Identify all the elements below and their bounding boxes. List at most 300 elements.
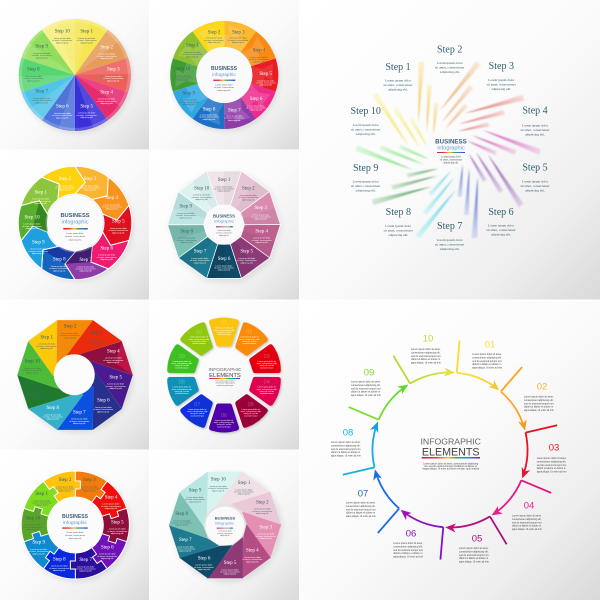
step 10: Step 10	[175, 67, 191, 72]
step 4	[252, 229, 272, 244]
step 5: adipiscing elit.	[525, 189, 545, 193]
step 6: adipiscing elit.	[218, 269, 231, 272]
step 10: adipiscing elit.	[195, 198, 209, 201]
step 7	[76, 558, 96, 573]
tile 09	[172, 354, 192, 369]
step 2: Step 2	[208, 30, 221, 35]
step 9	[29, 541, 49, 555]
step 1: sit amet, consectetuer	[77, 39, 97, 42]
description 03: agna aliqua. Ut enim ad min	[537, 471, 567, 474]
centre title: Lorem ipsum dolor sit amet, consectetuer adipiscing	[423, 462, 478, 465]
tile 09: amet, consectetuer adip	[172, 362, 192, 365]
centre title: adipiscing elit.	[219, 234, 230, 237]
step 3: Step 3	[489, 61, 514, 72]
step 5	[256, 72, 276, 87]
description 10: sed do eiusmod tempor inci-	[411, 355, 441, 358]
step 8: adipiscing elit.	[27, 79, 40, 82]
step 10: sit amet, consectetuer	[208, 487, 229, 490]
step 2	[435, 44, 465, 74]
step 10: sit amet, consectetuer	[351, 128, 381, 132]
tile 05: 05	[248, 402, 254, 408]
step 6: Lorem ipsum dolor	[98, 255, 115, 257]
step labels	[173, 30, 276, 122]
step 2: sit amet, consectetuer	[435, 65, 465, 70]
step 3: adipiscing elit.	[90, 343, 103, 346]
step 1: sit amet, consectetuer	[31, 200, 51, 203]
tile 09: 09	[179, 354, 185, 360]
step labels	[23, 478, 128, 573]
step 6: sit amet, consectetuer	[214, 266, 234, 269]
step 1: sit amet, consectetuer	[32, 501, 52, 504]
tile 07: amet, consectetuer adip	[187, 410, 207, 413]
step 9: Lorem ipsum dolor	[27, 394, 43, 396]
centre title: infographic	[437, 146, 465, 152]
step 6	[52, 105, 73, 119]
step labels	[176, 178, 272, 272]
step numbers: 09	[364, 368, 374, 378]
description 04: agna aliqua. Ut enim ad min	[512, 528, 542, 531]
step 4: Lorem ipsum dolor	[98, 99, 115, 101]
tile 03: 03	[264, 354, 270, 360]
description 04: consectetuer adipiscing elit,	[512, 518, 542, 521]
step 8	[23, 68, 44, 82]
step 10: sit amet, consectetuer	[173, 77, 193, 80]
step 6: Lorem ipsum dolor	[216, 265, 232, 267]
tile 02	[239, 330, 259, 345]
step 7: adipiscing elit.	[35, 101, 49, 104]
step 6: adipiscing elit.	[100, 258, 114, 261]
step 2	[204, 30, 224, 44]
step 6	[246, 97, 266, 112]
step 8: Step 8	[53, 557, 66, 562]
step 5: Step 5	[112, 220, 125, 225]
panel: rainbow pinwheel with hole	[17, 320, 133, 433]
step 1: Lorem ipsum dolor	[385, 78, 411, 82]
step 3	[79, 478, 100, 493]
step 8: adipiscing elit.	[388, 233, 408, 237]
centre title: magna aliqua. Ut enim ad minim veniam, quis nostrud	[422, 468, 480, 471]
step 1: Step 1	[40, 335, 54, 340]
step 5: Step 5	[80, 104, 94, 109]
centre title: INFOGRAPHIC	[208, 367, 242, 373]
step 8	[49, 258, 70, 272]
centre title	[196, 47, 252, 103]
description 05: didunt ut labore et dolore m	[459, 557, 488, 560]
step 8: Lorem ipsum dolor	[44, 414, 61, 416]
tile 05: eiusmod tempor	[244, 414, 258, 417]
step numbers: 02	[537, 382, 547, 392]
step 4: Lorem ipsum dolor	[244, 557, 261, 559]
step 5: Lorem ipsum dolor	[257, 80, 274, 82]
centre hole	[54, 354, 95, 395]
step 6	[97, 545, 118, 560]
step 9: Step 9	[189, 489, 202, 494]
panel: circular arrow cycle with spokes	[331, 332, 568, 568]
centre title: ELEMENTS	[422, 447, 480, 459]
step 7: sit amet, consectetuer	[76, 567, 96, 570]
description 08: Lorem ipsum dolor sit amet,	[331, 441, 360, 444]
description 08: sed do eiusmod tempor inci-	[331, 448, 361, 451]
step 5: sit amet, consectetuer	[237, 259, 257, 262]
step 4: sit amet, consectetuer	[103, 359, 124, 362]
step 3	[487, 61, 517, 91]
step 10: adipiscing elit.	[56, 41, 69, 44]
description 09: didunt ut labore et dolore m	[351, 391, 380, 394]
tile 01: amet, consectetuer adip	[214, 329, 234, 332]
step 8: sit amet, consectetuer	[384, 228, 414, 233]
step 6: Lorem ipsum dolor	[196, 565, 212, 567]
description 02: sed do eiusmod tempor inci-	[524, 402, 554, 405]
step 7: Lorem ipsum dolor	[71, 419, 88, 421]
tile 01: Lorem ipsum dolor sit	[215, 328, 233, 330]
tile 04: Lorem ipsum dolor sit	[258, 387, 276, 389]
step 8: Step 8	[53, 258, 66, 263]
step 1	[37, 335, 57, 350]
step 4: sit amet, consectetuer	[249, 58, 269, 61]
centre title: Lorem ipsum dolor	[66, 532, 84, 534]
tile 07	[187, 402, 207, 417]
step 6	[486, 207, 517, 237]
tile 02: eiusmod tempor	[243, 342, 256, 345]
swirl blades	[169, 471, 281, 579]
step 3: sit amet, consectetuer	[103, 77, 124, 80]
description 09: agna aliqua. Ut enim ad min	[351, 394, 381, 397]
step 2: adipiscing elit.	[256, 512, 269, 515]
step 8: Step 8	[203, 108, 216, 113]
step 4: Lorem ipsum dolor	[253, 238, 270, 240]
step 1: adipiscing elit.	[40, 347, 54, 350]
step 9: adipiscing elit.	[182, 103, 196, 106]
step 1: Step 1	[385, 62, 411, 73]
tile text	[172, 320, 277, 428]
step 8: Lorem ipsum dolor	[385, 224, 411, 228]
step labels	[172, 478, 276, 576]
step 2: sit amet, consectetuer	[60, 334, 80, 337]
step 7: sit amet, consectetuer	[435, 242, 465, 247]
step 3: Step 3	[232, 30, 245, 35]
step 9: adipiscing elit.	[32, 252, 45, 255]
step 4: adipiscing elit.	[105, 507, 118, 510]
step 4	[242, 549, 263, 563]
puzzle pieces	[14, 463, 136, 587]
step 1: adipiscing elit.	[186, 55, 199, 58]
step 7: Step 7	[73, 410, 86, 415]
step 9: Step 9	[35, 45, 49, 50]
step numbers: 01	[485, 340, 495, 350]
centre title: Lorem ipsum dolor	[215, 84, 233, 86]
step 8	[199, 108, 219, 121]
description 03: consectetuer adipiscing elit,	[537, 460, 566, 463]
step 4	[249, 49, 269, 63]
step 5: Lorem ipsum dolor	[78, 113, 95, 115]
step 6: Step 6	[56, 105, 69, 110]
tile 06: amet, consectetuer adip	[214, 421, 234, 424]
centre title: INFOGRAPHIC	[421, 436, 481, 446]
tile 04: eiusmod tempor	[260, 392, 274, 395]
pie wedges	[11, 10, 138, 140]
step numbers: 05	[472, 534, 482, 544]
step 10: adipiscing elit.	[26, 528, 40, 531]
step 6	[97, 246, 117, 261]
step 2	[252, 500, 273, 515]
tile 10	[189, 330, 209, 345]
step 9: Lorem ipsum dolor	[180, 100, 197, 102]
centre title: Lorem ipsum dolor sit amet,	[215, 382, 235, 383]
step 4	[97, 90, 117, 105]
step 5: Lorem ipsum dolor	[109, 529, 126, 531]
step 9	[25, 386, 45, 401]
step 7: Step 7	[194, 250, 207, 255]
tile 06	[214, 413, 234, 428]
step 5	[107, 520, 128, 535]
step 8: sit amet, consectetuer	[49, 267, 70, 270]
step 5: sit amet, consectetuer	[106, 385, 126, 388]
centre title: adipiscing elit.	[220, 534, 231, 537]
step 9: Step 9	[179, 205, 193, 210]
tile 04: amet, consectetuer adip	[257, 388, 277, 391]
step 6: Step 6	[198, 556, 211, 561]
step 3	[251, 206, 271, 221]
step 3: adipiscing elit.	[491, 87, 511, 91]
step 9: Step 9	[29, 386, 42, 391]
centre title: sit amet, consectetuer	[214, 86, 234, 89]
step 5	[108, 220, 129, 234]
step 4: Step 4	[255, 229, 269, 234]
step 2: sit amet, consectetuer	[97, 55, 117, 58]
centre title: Lorem ipsum dolor	[217, 231, 231, 232]
centre title: BUSINESS	[215, 516, 236, 520]
step 4: adipiscing elit.	[246, 560, 259, 563]
step 2: Lorem ipsum dolor	[62, 333, 78, 335]
step 7	[175, 538, 196, 553]
description 01: agna aliqua. Ut enim ad min	[472, 367, 503, 370]
centre title: sed do eiusmod tempor	[217, 384, 234, 387]
step 4: adipiscing elit.	[255, 241, 269, 244]
step 5: Lorem ipsum dolor	[522, 180, 548, 184]
step 10: Lorem ipsum dolor	[210, 486, 227, 488]
step 4: adipiscing elit.	[253, 60, 266, 63]
description 07: Lorem ipsum dolor sit amet,	[346, 502, 376, 504]
step 9: adipiscing elit.	[356, 189, 376, 193]
step 1	[31, 190, 51, 205]
step 6: sit amet, consectetuer	[52, 114, 73, 117]
step 7: Lorem ipsum dolor	[192, 258, 208, 260]
step 1: sit amet, consectetuer	[182, 53, 203, 56]
step 6: adipiscing elit.	[491, 233, 511, 237]
step 7: sit amet, consectetuer	[175, 547, 196, 550]
description 01: consectetuer adipiscing elit,	[472, 356, 502, 359]
step 1: Step 1	[186, 44, 199, 49]
step 1	[32, 492, 52, 507]
step 2: adipiscing elit.	[100, 57, 114, 60]
step 6: sit amet, consectetuer	[194, 566, 214, 569]
centre title: infographic	[63, 520, 88, 526]
step 7: Step 7	[79, 558, 93, 563]
step 9: sit amet, consectetuer	[32, 54, 52, 57]
step 2: Step 2	[100, 45, 114, 50]
step 1: Lorem ipsum dolor	[184, 52, 201, 54]
step 3: sit amet, consectetuer	[487, 83, 517, 88]
description 05: agna aliqua. Ut enim ad min	[459, 561, 489, 564]
centre title: infographic	[215, 520, 234, 526]
step 10: Step 10	[351, 106, 381, 117]
centre title: BUSINESS	[211, 66, 238, 72]
step 6: sit amet, consectetuer	[246, 107, 266, 110]
tile 04	[257, 380, 277, 395]
step 6: sit amet, consectetuer	[97, 555, 118, 558]
step 3: Step 3	[107, 68, 120, 73]
tile 08	[172, 380, 192, 395]
step 5: Step 5	[522, 163, 548, 174]
tile 08: iscing elit, sed do	[174, 390, 189, 393]
tile 02: iscing elit, sed do	[242, 340, 257, 343]
centre title: sit amet, consectetuer	[65, 534, 85, 537]
step 5: sit amet, consectetuer	[108, 229, 129, 232]
step 2: adipiscing elit.	[59, 189, 72, 192]
tile 04: iscing elit, sed do	[259, 390, 274, 393]
step 8	[172, 512, 192, 527]
step 9: Lorem ipsum dolor	[30, 549, 47, 551]
step 7: Step 7	[228, 109, 241, 114]
step labels	[351, 44, 551, 251]
step 5: Lorem ipsum dolor	[222, 569, 238, 571]
step 3: Lorem ipsum dolor	[252, 214, 269, 216]
step 4: Step 4	[522, 106, 548, 117]
step 7: adipiscing elit.	[440, 247, 460, 251]
step 4: Lorem ipsum dolor	[251, 57, 267, 59]
step 2: Lorem ipsum dolor	[437, 61, 463, 65]
description 08: agna aliqua. Ut enim ad min	[331, 455, 361, 458]
step 5	[237, 250, 257, 264]
step 4: adipiscing elit.	[105, 208, 119, 211]
step 8: Step 8	[386, 207, 411, 218]
step 3	[86, 331, 106, 346]
step 1: adipiscing elit.	[34, 202, 48, 205]
description 06: sed do eiusmod tempor inci-	[393, 549, 424, 552]
step 1: Step 1	[238, 481, 251, 486]
step 2: adipiscing elit.	[242, 198, 255, 201]
step 6: Lorem ipsum dolor	[54, 113, 71, 115]
step 3: adipiscing elit.	[84, 189, 97, 192]
tile 05: iscing elit, sed do	[243, 412, 258, 415]
tile 06: Lorem ipsum dolor sit	[215, 420, 233, 422]
step 1: adipiscing elit.	[35, 504, 49, 507]
step 8: sit amet, consectetuer	[49, 567, 70, 570]
step 7	[224, 109, 245, 122]
step 8: adipiscing elit.	[53, 569, 66, 572]
step 10: adipiscing elit.	[26, 227, 39, 230]
description 09: consectetuer adipiscing elit,	[351, 384, 381, 387]
description 06: didunt ut labore et dolore m	[393, 552, 422, 555]
step 1: adipiscing elit.	[238, 493, 251, 496]
step 5	[220, 561, 240, 576]
step 10	[23, 516, 43, 531]
tile 03: amet, consectetuer adip	[257, 362, 277, 365]
step 9	[176, 205, 196, 219]
step 7: Lorem ipsum dolor	[177, 546, 194, 548]
step 10: sit amet, consectetuer	[22, 225, 42, 228]
step 10: Step 10	[25, 360, 40, 365]
step 4: Lorem ipsum dolor	[522, 123, 548, 127]
step 5	[106, 375, 126, 390]
step 7: adipiscing elit.	[79, 270, 93, 273]
panel: pink and teal decagon	[168, 171, 282, 282]
step 8	[384, 207, 414, 237]
step 9	[179, 91, 199, 106]
step 8: Step 8	[180, 229, 194, 234]
step 9: Step 9	[32, 541, 46, 546]
description 04: Lorem ipsum dolor sit amet,	[512, 514, 542, 518]
step 4: Lorem ipsum dolor	[105, 358, 122, 360]
step 10: sit amet, consectetuer	[192, 196, 212, 199]
step 4	[102, 196, 122, 211]
step 8: Lorem ipsum dolor	[51, 266, 68, 268]
step 2: Step 2	[437, 44, 462, 55]
step 10: sit amet, consectetuer	[22, 369, 43, 372]
step 4: Step 4	[105, 196, 119, 201]
step 5: Step 5	[240, 250, 254, 255]
step 8: adipiscing elit.	[53, 269, 66, 272]
step 4: Step 4	[100, 90, 114, 95]
step 10: Lorem ipsum dolor	[54, 38, 71, 40]
step 3: Lorem ipsum dolor	[257, 534, 274, 536]
tile 03	[257, 354, 277, 369]
step 4: Lorem ipsum dolor	[103, 504, 119, 506]
step 7	[435, 221, 465, 251]
step 9: Lorem ipsum dolor	[33, 53, 50, 55]
step 3: adipiscing elit.	[254, 218, 268, 221]
step 1: adipiscing elit.	[388, 87, 408, 91]
step 3: sit amet, consectetuer	[80, 187, 100, 190]
step 1: Lorem ipsum dolor	[236, 489, 252, 491]
step 1: Step 1	[218, 178, 231, 183]
step numbers: 08	[343, 428, 353, 438]
step numbers: 07	[358, 488, 368, 500]
step 7: sit amet, consectetuer	[190, 259, 210, 262]
step 7: sit amet, consectetuer	[69, 420, 90, 423]
step 2: sit amet, consectetuer	[55, 187, 75, 190]
step 10: Step 10	[55, 30, 70, 35]
step 7: adipiscing elit.	[79, 570, 93, 573]
description 06: consectetuer adipiscing elit,	[393, 545, 423, 548]
step 9: sit amet, consectetuer	[29, 550, 49, 553]
tile 10: Lorem ipsum dolor sit	[190, 337, 208, 339]
step 2	[55, 177, 75, 192]
step 7: Lorem ipsum dolor	[77, 266, 94, 268]
step 8: sit amet, consectetuer	[43, 415, 63, 418]
step 7: adipiscing elit.	[179, 550, 192, 553]
step 5: adipiscing elit.	[111, 532, 124, 535]
step 6: Step 6	[97, 399, 110, 404]
description 07: agna aliqua. Ut enim ad min	[346, 515, 376, 518]
step 5: sit amet, consectetuer	[220, 570, 240, 573]
step descriptions	[331, 348, 567, 564]
step 4	[103, 349, 124, 364]
centre title: BUSINESS	[213, 214, 235, 218]
step 10: Lorem ipsum dolor	[24, 224, 40, 226]
step 1: Lorem ipsum dolor	[216, 186, 232, 188]
step 10: Lorem ipsum dolor	[353, 123, 379, 127]
step 6: adipiscing elit.	[101, 557, 114, 560]
step 10: Lorem ipsum dolor	[174, 75, 191, 77]
step 2: Step 2	[59, 478, 72, 483]
step 10: Step 10	[211, 478, 226, 483]
step 3: Step 3	[83, 478, 96, 483]
description 05: consectetuer adipiscing elit,	[459, 550, 489, 553]
tile 07: eiusmod tempor	[191, 414, 204, 417]
step 8: Lorem ipsum dolor	[173, 520, 190, 522]
description 06: Lorem ipsum dolor sit amet,	[393, 542, 423, 545]
